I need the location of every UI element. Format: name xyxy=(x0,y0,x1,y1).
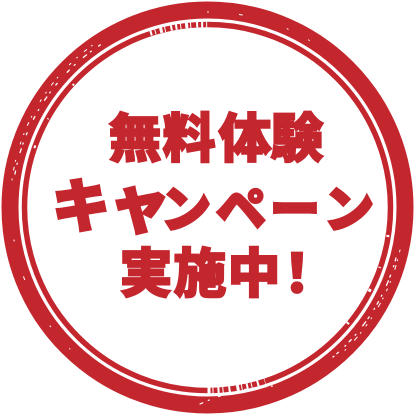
headline line 3: 実施中！ xyxy=(120,245,324,304)
headline line 2: キャンペーン xyxy=(52,172,374,241)
headline line 1: 無料体験 xyxy=(108,110,324,169)
inner stamp ring xyxy=(24,24,390,390)
distressed wear marks on inner ring xyxy=(28,24,388,390)
campaign headline xyxy=(52,110,374,304)
